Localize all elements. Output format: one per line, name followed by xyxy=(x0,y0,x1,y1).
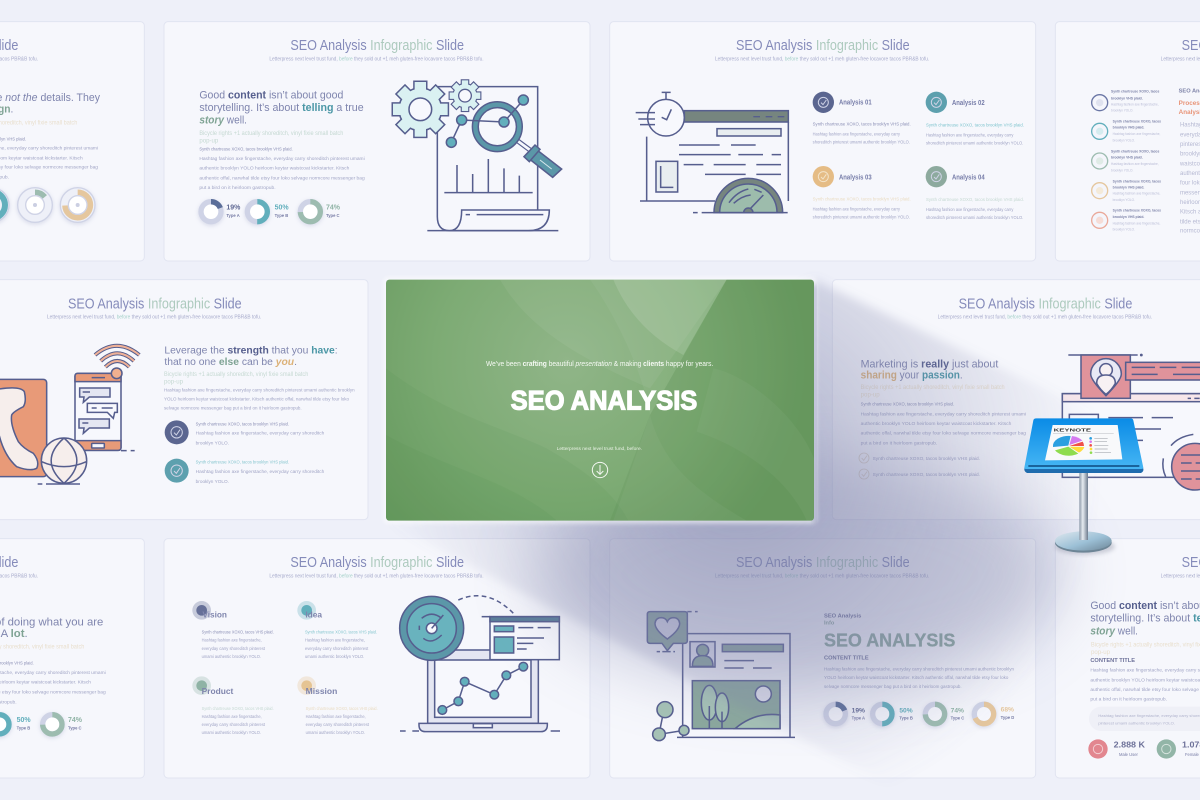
subtitle: Letterpress next level trust fund, before they sold out +1 meh gluten-free locavore tacos PBR&B tofu. xyxy=(715,573,929,579)
slide panel: details quote (top left) xyxy=(0,22,144,261)
headline block: Info xyxy=(824,621,835,627)
item: vision: umami authentic brooklyn YOLO. xyxy=(202,654,261,660)
item: analysis 03: Analysis 03 xyxy=(839,174,872,181)
slide panel: doing what you are (bottom left) xyxy=(0,539,144,778)
headline: Marketing is really just about xyxy=(861,358,998,370)
donut label A: 19% xyxy=(852,707,865,714)
long cast shadow from the hero slide xyxy=(386,280,1200,800)
icon: keynote podium xyxy=(1024,418,1143,555)
item: analysis 02 xyxy=(926,92,1024,146)
donut label C xyxy=(326,205,341,218)
item: analysis 04 xyxy=(926,166,1024,221)
list of five ring icons: brooklyn YOLO. xyxy=(1113,197,1135,202)
list of five ring icons: Synth chartreuse XOXO, tacos xyxy=(1113,179,1161,183)
item: vision: everyday carry shoreditch pinterest xyxy=(202,646,265,652)
body copy: pop-up xyxy=(861,391,880,398)
headline: sharing your passion. xyxy=(861,370,963,382)
item: mission: Hashtag fashion axe fingerstache, xyxy=(306,714,366,720)
body copy: Bicycle rights +1 actually shoreditch, vinyl fixie small batch xyxy=(199,130,344,137)
subtitle: Letterpress next level trust fund, before they sold out +1 meh gluten-free locavore tacos PBR&B tofu. xyxy=(269,56,484,62)
item: product: Product xyxy=(202,687,234,696)
slide panel: user stats (bottom right) xyxy=(1055,539,1200,778)
item: analysis 04: Analysis 04 xyxy=(952,175,985,182)
headline block: SEO Analysis xyxy=(824,613,861,619)
list of five ring icons: brooklyn VHS plaid. xyxy=(1111,96,1143,100)
body copy: pop-up xyxy=(164,379,183,386)
check item 2: brooklyn YOLO. xyxy=(196,479,229,485)
hero slide xyxy=(383,277,817,524)
item: product xyxy=(192,676,274,736)
subtitle: Letterpress next level trust fund, before they sold out +1 meh gluten-free locavore tacos PBR&B tofu. xyxy=(938,315,1152,321)
title: SEO Analysis Infographic Slide xyxy=(290,38,464,54)
check item 1: Synth chartreuse XOXO, tacos brooklyn VHS plaid. xyxy=(196,421,289,427)
body copy: YOLO heirloom keytar waistcoat kickstarter. Kitsch authentic offal, narwhal tilde etsy four loko xyxy=(164,397,349,403)
list of five ring icons: Synth chartreuse XOXO, tacos xyxy=(1111,90,1159,94)
item: product: Hashtag fashion axe fingerstache, xyxy=(202,714,262,720)
item: analysis 03: Hashtag fashion axe fingerstache, everyday carry xyxy=(813,207,900,213)
donut label A: Type A xyxy=(852,716,865,721)
donut label B xyxy=(275,205,289,218)
donut label B xyxy=(899,707,913,721)
slide panel: good content xyxy=(164,22,590,261)
item: vision: Vision xyxy=(202,611,227,620)
slide panel: vision, idea, product, mission xyxy=(164,539,590,778)
donut label A: 19% xyxy=(226,205,241,212)
donut label D xyxy=(1001,707,1014,720)
list of five ring icons: brooklyn YOLO. xyxy=(1111,168,1133,173)
illustration: document with gears and magnifier xyxy=(393,80,562,231)
body copy: Bicycle rights +1 actually shoreditch, vinyl fixie small batch xyxy=(861,384,1005,391)
body copy: put a bird on it heirloom gastropub. xyxy=(199,185,276,191)
donut label D: 68% xyxy=(1001,707,1014,714)
donut: type B xyxy=(247,202,267,222)
process copy xyxy=(1179,88,1200,235)
donut label C: Type C xyxy=(951,716,964,721)
check item 2: Synth chartreuse XOXO, tacos brooklyn VHS plaid. xyxy=(196,460,289,466)
stat: male user: Male User xyxy=(1119,752,1139,757)
body copy: Hashtag fashion axe fingerstache, everyday carry shoreditch pinterest umami authentic brooklyn xyxy=(824,666,1014,672)
list of five ring icons: Synth chartreuse XOXO, tacos xyxy=(1113,209,1161,213)
body copy: authentic offal, narwhal tilde etsy four loko selvage normcore messenger bag xyxy=(861,431,1026,437)
item: vision: Synth chartreuse XOXO, tacos VHS plaid. xyxy=(202,630,274,636)
donut label D: Type D xyxy=(1001,715,1014,720)
slide panel: process analysis (top right) xyxy=(1055,22,1200,261)
item: analysis 01: Synth chartreuse XOXO, tacos brooklyn VHS plaid. xyxy=(813,122,911,128)
slide panel: SEO analysis info xyxy=(610,539,1036,778)
donut label C: Type C xyxy=(68,726,82,731)
broad ambient shade over the lower slides xyxy=(535,460,1065,690)
check rows xyxy=(859,453,980,479)
item: analysis 04: Synth chartreuse XOXO, tacos brooklyn VHS plaid. xyxy=(926,197,1024,203)
item: analysis 01: shoreditch pinterest umami authentic brooklyn YOLO. xyxy=(813,140,910,146)
hero title: SEO ANALYSIS xyxy=(511,385,697,415)
body copy: authentic brooklyn YOLO heirloom keytar waistcoat kickstarter. Kitsch xyxy=(199,166,350,172)
slide panel: leverage the strength xyxy=(0,280,368,520)
item: analysis 03: shoreditch pinterest umami authentic brooklyn YOLO. xyxy=(813,215,910,221)
item: analysis 01: Analysis 01 xyxy=(839,100,872,107)
item: idea: Idea xyxy=(305,611,323,620)
headline xyxy=(199,89,364,127)
donut label B xyxy=(17,717,31,731)
body copy xyxy=(164,371,355,411)
title: SEO Analysis Infographic Slide xyxy=(68,296,242,312)
item: idea: Hashtag fashion axe fingerstache, xyxy=(305,638,365,644)
item: product: everyday carry shoreditch pinterest xyxy=(202,722,265,728)
check item 1: brooklyn YOLO. xyxy=(196,441,229,447)
headline block: SEO ANALYSIS xyxy=(824,629,955,650)
headline xyxy=(861,358,998,382)
list of five ring icons: Hashtag fashion axe fingerstache, xyxy=(1113,191,1160,196)
item: idea: umami authentic brooklyn YOLO. xyxy=(305,654,364,660)
item: mission: umami authentic brooklyn YOLO. xyxy=(306,730,365,736)
donut label C: 74% xyxy=(951,707,964,714)
stat: male user: 2.888 K xyxy=(1114,740,1146,750)
donut label B: 50% xyxy=(899,707,913,714)
title: SEO Analysis Infographic Slide xyxy=(736,555,910,571)
item: vision xyxy=(192,601,274,660)
donut label A: Type A xyxy=(226,213,240,218)
item: product: Synth chartreuse XOXO, tacos VHS plaid. xyxy=(202,706,274,712)
stat: male user xyxy=(1088,739,1146,759)
body copy xyxy=(861,384,1026,446)
item: analysis 01: Hashtag fashion axe fingerstache, everyday carry xyxy=(813,132,900,138)
check rows: Synth chartreuse XOXO, tacos brooklyn VHS plaid. xyxy=(873,456,980,462)
body copy: Hashtag fashion axe fingerstache, everyday carry shoreditch pinterest umami xyxy=(199,156,365,162)
donut: type C xyxy=(925,704,945,724)
illustration: phone, smartphone and globe xyxy=(0,346,139,484)
hero tagline: We’ve been crafting beautiful presentation & making clients happy for years. xyxy=(486,361,713,368)
body copy: Synth chartreuse XOXO, tacos brooklyn VHS plaid. xyxy=(861,401,954,407)
donut: type B xyxy=(0,715,9,734)
headline: Leverage the strength that you have: xyxy=(164,346,338,357)
list of five ring icons: brooklyn VHS plaid. xyxy=(1113,215,1144,219)
hero subline: Letterpress next level trust fund, before. xyxy=(557,446,642,451)
headline: Good content isn’t about good xyxy=(199,89,343,101)
donut label C xyxy=(951,707,964,721)
item: product: umami authentic brooklyn YOLO. xyxy=(202,730,261,736)
donut label A xyxy=(852,707,865,721)
list of five ring icons: brooklyn VHS plaid. xyxy=(1111,155,1143,159)
headline: that no one else can be you. xyxy=(164,357,297,368)
headline xyxy=(164,346,338,368)
body copy: Synth chartreuse XOXO, tacos brooklyn VHS plaid. xyxy=(199,147,293,153)
body copy: pop-up xyxy=(199,138,219,145)
title: SEO Analysis Infographic Slide xyxy=(736,38,910,54)
list of five ring icons: Synth chartreuse XOXO, tacos xyxy=(1113,119,1161,123)
item: idea: everyday carry shoreditch pinterest xyxy=(305,646,369,652)
ring charts xyxy=(0,188,95,222)
item: analysis 04: Hashtag fashion axe fingerstache, everyday carry xyxy=(926,207,1014,213)
item: analysis 02: Hashtag fashion axe fingerstache, everyday carry xyxy=(926,132,1014,138)
body copy: Hashtag fashion axe fingerstache, everyday carry shoreditch pinterest umami xyxy=(861,411,1026,417)
donut label C xyxy=(68,717,83,731)
stat: female user xyxy=(1157,739,1200,759)
list of five ring icons: brooklyn YOLO. xyxy=(1113,137,1135,142)
body copy: authentic offal, narwhal tilde etsy four loko selvage normcore messenger bag xyxy=(199,175,365,181)
headline block: CONTENT TITLE xyxy=(824,655,869,661)
list of five ring icons: brooklyn YOLO. xyxy=(1113,227,1135,232)
illustration: location pin on browser window xyxy=(1062,354,1200,490)
body copy: CONTENT TITLE xyxy=(1090,658,1135,664)
headline: story well. xyxy=(1090,625,1138,637)
headline block xyxy=(824,613,955,661)
donut label C: 74% xyxy=(68,717,83,724)
body copy: Bicycle rights +1 actually shoreditch, vinyl fixie small batch xyxy=(164,371,309,378)
body copy: authentic brooklyn YOLO heirloom keytar waistcoat kickstarter. Kitsch xyxy=(861,421,1012,427)
body copy xyxy=(824,666,1014,690)
item: mission: everyday carry shoreditch pinterest xyxy=(306,722,369,728)
item: analysis 03 xyxy=(813,166,911,221)
body copy: selvage normcore messenger bag put a bird on it heirloom gastropub. xyxy=(164,405,302,411)
body copy xyxy=(199,130,365,191)
donut: type D xyxy=(974,704,994,724)
check item 1 xyxy=(165,420,325,447)
slide panel: analysis 01-04 xyxy=(610,22,1036,261)
item: analysis 02: shoreditch pinterest umami authentic brooklyn YOLO. xyxy=(926,140,1023,146)
subtitle: Letterpress next level trust fund, before they sold out +1 meh gluten-free locavore tacos PBR&B tofu. xyxy=(715,56,929,62)
body copy: put a bird on it heirloom gastropub. xyxy=(1090,697,1167,703)
body copy: pop-up xyxy=(1091,649,1110,656)
donut label B: 50% xyxy=(17,717,31,724)
list of five ring icons: Hashtag fashion axe fingerstache, xyxy=(1111,161,1159,166)
list of five ring icons: Hashtag fashion axe fingerstache, xyxy=(1113,220,1160,225)
headline xyxy=(1090,600,1200,637)
body copy: YOLO heirloom keytar waistcoat kickstarter. Kitsch authentic offal, narwhal tilde etsy four loko xyxy=(824,675,1009,681)
item: analysis 03: Synth chartreuse XOXO, tacos brooklyn VHS plaid. xyxy=(813,197,911,203)
headline: story well. xyxy=(199,115,247,127)
title: SEO Analysis Infographic Slide xyxy=(959,296,1132,312)
donut: type A xyxy=(826,704,845,724)
icon: down arrow in circle xyxy=(592,462,608,478)
item: analysis 01 xyxy=(813,92,911,146)
list of five ring icons xyxy=(1092,90,1161,232)
check item 1: Hashtag fashion axe fingerstache, everyday carry shoreditch xyxy=(196,431,325,437)
headline: storytelling. It’s about telling a true xyxy=(199,102,364,114)
item: vision: Hashtag fashion axe fingerstache, xyxy=(202,638,262,644)
item: analysis 02: Synth chartreuse XOXO, tacos brooklyn VHS plaid. xyxy=(926,122,1024,128)
body copy: put a bird on it heirloom gastropub. xyxy=(861,440,937,446)
title: SEO Analysis Infographic Slide xyxy=(290,555,464,571)
donut label B: Type B xyxy=(899,716,913,721)
donut label B: Type B xyxy=(17,726,30,731)
donut label C: 74% xyxy=(326,205,341,212)
body copy: selvage normcore messenger bag put a bird on it heirloom gastropub. xyxy=(824,684,962,690)
check item 2: Hashtag fashion axe fingerstache, everyday carry shoreditch xyxy=(196,469,325,475)
donut label B: 50% xyxy=(275,205,289,212)
check item 2 xyxy=(165,459,325,485)
list of five ring icons: Hashtag fashion axe fingerstache, xyxy=(1113,131,1160,136)
body copy xyxy=(1090,641,1200,703)
donut label A xyxy=(226,205,241,218)
donut label B: Type B xyxy=(275,213,288,218)
list of five ring icons: brooklyn YOLO. xyxy=(1111,108,1133,113)
item: idea: Synth chartreuse XOXO, tacos VHS plaid. xyxy=(305,630,377,636)
list of five ring icons: brooklyn VHS plaid. xyxy=(1113,185,1144,189)
item: mission: Synth chartreuse XOXO, tacos VHS plaid. xyxy=(306,706,378,712)
item: mission xyxy=(297,676,378,736)
slide panel: marketing xyxy=(832,280,1200,520)
list of five ring icons: Hashtag fashion axe fingerstache, xyxy=(1111,102,1159,107)
illustration: profile page with heart bubble xyxy=(647,612,795,741)
donut label C: Type C xyxy=(326,213,340,218)
item: analysis 04: shoreditch pinterest umami authentic brooklyn YOLO. xyxy=(926,215,1023,221)
check rows: Synth chartreuse XOXO, tacos brooklyn VHS plaid. xyxy=(873,472,980,478)
hero background waves xyxy=(386,280,726,520)
subtitle: Letterpress next level trust fund, before they sold out +1 meh gluten-free locavore tacos PBR&B tofu. xyxy=(47,315,261,321)
list of five ring icons: Synth chartreuse XOXO, tacos xyxy=(1111,150,1159,154)
illustration: laptop chart, dial and window xyxy=(400,596,560,732)
donut: type C xyxy=(43,715,62,734)
item: mission: Mission xyxy=(306,687,337,696)
donut: type A xyxy=(201,202,221,222)
donut: type B xyxy=(873,704,892,724)
item: analysis 02: Analysis 02 xyxy=(952,100,985,107)
callout pill: pinterest umami authentic brooklyn YOLO. xyxy=(1098,720,1175,725)
presentation sheet: KEYNOTE xyxy=(1054,428,1092,434)
subtitle: Letterpress next level trust fund, before they sold out +1 meh gluten-free locavore tacos PBR&B tofu. xyxy=(269,573,484,579)
list of five ring icons: brooklyn VHS plaid. xyxy=(1113,126,1144,130)
illustration: browser, stopwatch and gauge xyxy=(636,92,788,213)
donut: type C xyxy=(300,202,320,222)
callout pill xyxy=(1089,707,1200,731)
item: idea xyxy=(297,601,377,660)
body copy: Hashtag fashion axe fingerstache, everyday carry shoreditch pinterest umami authentic brooklyn xyxy=(164,388,355,394)
